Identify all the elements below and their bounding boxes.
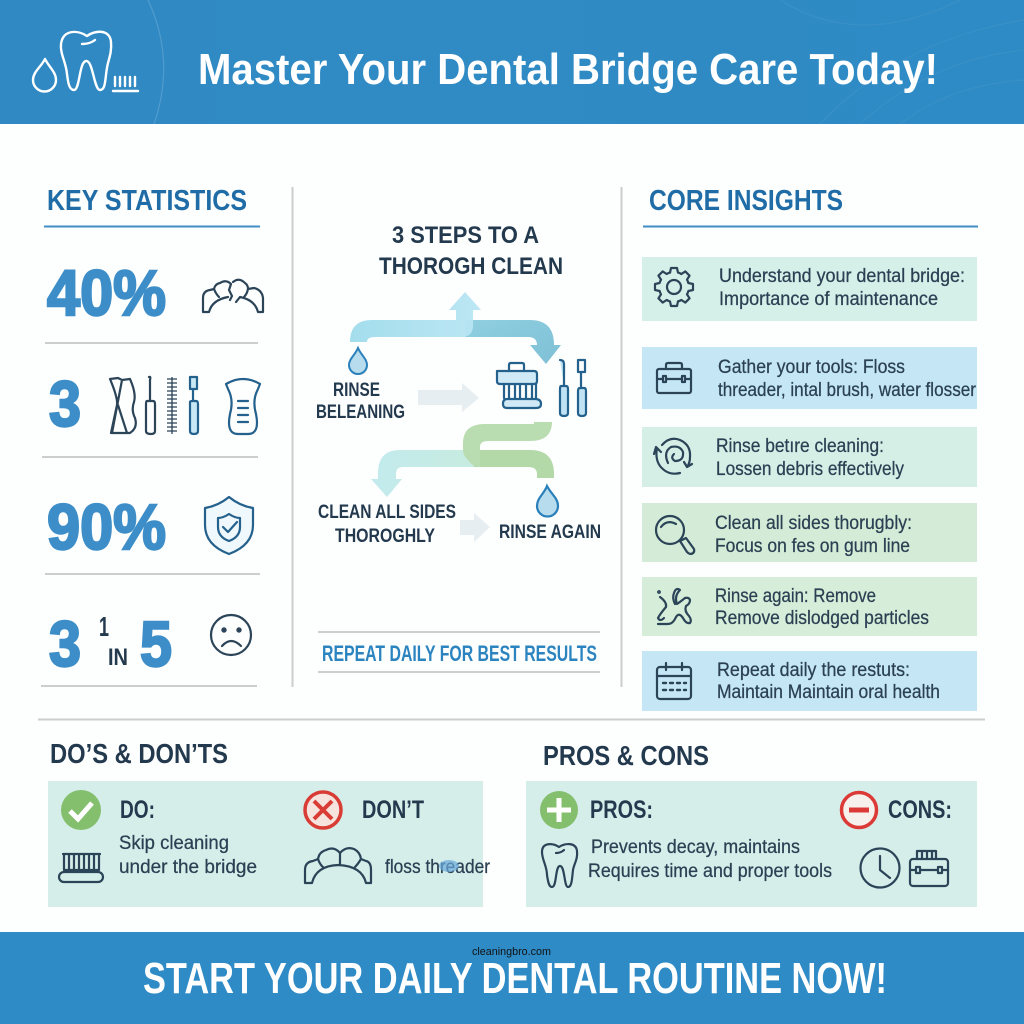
icon: shield with check xyxy=(205,497,253,554)
insight card 3: Lossen debris effectively xyxy=(716,459,904,480)
heading: steps: 3 STEPS TO A xyxy=(392,222,539,249)
insight card 4: Clean all sides thorugbly: xyxy=(715,513,912,534)
text: skip cleaning: Skip cleaning xyxy=(119,833,229,854)
insight card 2: threader, intal brush, water flosser xyxy=(718,380,977,401)
label: don't: DON’T xyxy=(362,796,424,824)
heading: pros and cons: PROS & CONS xyxy=(543,740,709,771)
stat: 3 1 in 5: 1 xyxy=(99,611,109,642)
insight card 6 xyxy=(642,651,977,711)
arrow: teal left turn xyxy=(371,450,474,497)
icon: water drop xyxy=(349,348,367,374)
arrow: light up turn xyxy=(350,292,481,342)
arrow: grey small right xyxy=(460,513,490,542)
insight card 6: Repeat daily the restuts: xyxy=(717,660,910,681)
insight card 5: Rinse again: Remove xyxy=(715,586,876,607)
stat: 3 1 in 5 xyxy=(49,608,172,680)
icon: calendar xyxy=(657,663,691,699)
icon: toolbox xyxy=(910,851,948,886)
icon: swirl rinse xyxy=(654,439,692,474)
icon: sad face xyxy=(211,615,251,655)
icon: dental tools xyxy=(110,377,260,434)
icon: water cup xyxy=(226,379,260,434)
label: rinse again: RINSE AGAIN xyxy=(499,522,601,543)
icon: magnifier xyxy=(656,516,694,554)
insight card 1 xyxy=(642,257,977,321)
stat: 90%: 90% xyxy=(47,491,166,563)
header banner xyxy=(0,0,1024,124)
label: cons: CONS: xyxy=(888,796,952,824)
icon: pick xyxy=(146,377,155,434)
label: clean all sides xyxy=(318,502,456,547)
insight card 3: Rinse betıre cleaning: xyxy=(716,436,884,457)
stat: 3 tools: 3 xyxy=(49,368,81,440)
insight card 3 xyxy=(642,427,977,487)
text: floss threader: floss threader xyxy=(385,857,491,878)
icon: toothbrush xyxy=(190,377,198,434)
callout: repeat daily: REPEAT DAILY FOR BEST RESULTS xyxy=(322,641,597,666)
icon: clock xyxy=(860,848,900,888)
arrow: green lower turn xyxy=(463,450,554,478)
icon: cross circle xyxy=(305,792,341,828)
icon: water drop again xyxy=(537,486,558,516)
footer banner xyxy=(0,932,1024,1024)
heading: steps: THOROGH CLEAN xyxy=(379,253,563,280)
label: rinse: RINSE xyxy=(333,380,380,401)
stat: 3 1 in 5: 3 xyxy=(49,608,81,680)
insight card 5: Remove dislodged particles xyxy=(715,608,929,629)
text: skip cleaning: under the bridge xyxy=(119,857,257,878)
arrow: green s curve xyxy=(463,422,552,467)
insight card 4: Focus on fes on gum line xyxy=(715,536,910,557)
heading: key statistics: KEY STATISTICS xyxy=(47,185,247,217)
panel: three steps flow xyxy=(316,222,601,672)
label: do: DO: xyxy=(120,796,155,824)
icon: gear xyxy=(655,268,693,306)
icon: floss threader xyxy=(110,378,136,433)
smudge xyxy=(439,860,459,872)
stat: 40%: 40% xyxy=(47,257,166,329)
heading: do's and don'ts: DO’S & DON’TS xyxy=(50,738,228,769)
insight card 4 xyxy=(642,503,977,562)
panel: core insights xyxy=(642,185,978,711)
insight card 1: Importance of maintenance xyxy=(719,289,938,310)
text: prevents decay: Requires time and proper tools xyxy=(588,861,832,882)
icon: brush head xyxy=(59,854,103,882)
heading: steps xyxy=(379,222,563,280)
icon: splash xyxy=(658,589,691,624)
insight card 2 xyxy=(642,347,977,409)
arrow: grey right xyxy=(418,383,479,412)
icon: interdental brush xyxy=(167,377,177,434)
insight card 1: Understand your dental bridge: xyxy=(719,266,965,287)
insight card 5 xyxy=(642,577,977,636)
panel: key statistics xyxy=(41,185,263,686)
heading: core insights: CORE INSIGHTS xyxy=(649,185,843,217)
label: clean all sides: THOROGHLY xyxy=(335,526,435,547)
insight card 2: Gather your tools: Floss xyxy=(718,357,905,378)
panel: do's and don'ts xyxy=(48,781,491,907)
icon: minus circle xyxy=(842,792,876,828)
icon: broken bridge xyxy=(203,280,263,312)
title: Master Your Dental Bridge Care Today! xyxy=(198,45,938,94)
label: rinse xyxy=(316,380,405,423)
text: prevents decay: Prevents decay, maintains xyxy=(591,837,800,858)
icon: plus circle xyxy=(540,791,578,829)
stat: 3 1 in 5: 5 xyxy=(140,608,172,680)
text: prevents decay xyxy=(588,837,832,882)
icon: tooth xyxy=(542,844,577,887)
text: skip cleaning xyxy=(119,833,257,878)
insight card 6: Maintain Maintain oral health xyxy=(717,682,940,703)
icon: toolbox xyxy=(657,363,691,393)
label: clean all sides: CLEAN ALL SIDES xyxy=(318,502,456,523)
label: rinse: BELEANING xyxy=(316,402,405,423)
watermark: cleaningbro.com xyxy=(472,946,551,958)
label: pros: PROS: xyxy=(590,796,653,824)
icon: check circle xyxy=(61,790,101,830)
stat: 3 1 in 5: IN xyxy=(108,644,128,671)
panel: pros and cons xyxy=(526,781,977,907)
arrow: dark right turn xyxy=(465,320,561,364)
icon: bridge xyxy=(305,848,371,883)
icon: tooth with water drop and brush xyxy=(33,32,138,92)
icon: brush head and tools xyxy=(497,360,586,416)
